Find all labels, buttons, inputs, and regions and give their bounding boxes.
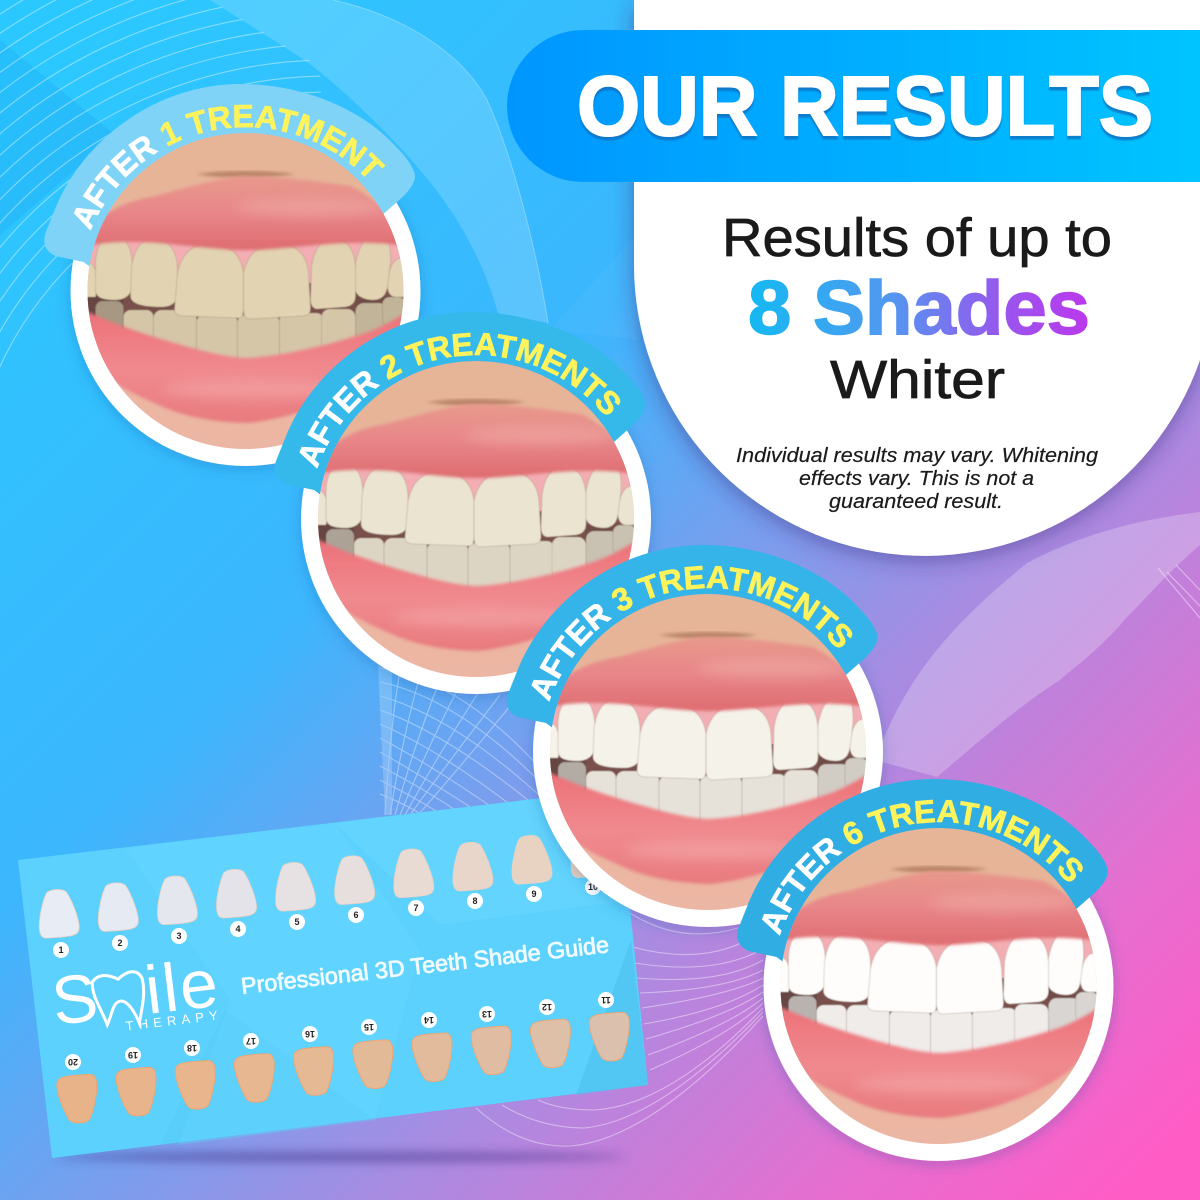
shade numbers: 7 xyxy=(413,903,419,913)
headline: results of up to 8 shades whiter: Whiter xyxy=(830,350,1005,410)
panel: white results panel xyxy=(634,0,1200,556)
banner xyxy=(275,312,645,499)
disclaimer text: effects vary. This is not a xyxy=(799,467,1034,490)
banner xyxy=(507,545,877,732)
result card: after 1 treatment xyxy=(44,84,425,473)
shade numbers: 19 xyxy=(128,1050,138,1060)
shade numbers: 18 xyxy=(187,1043,197,1053)
shade numbers: 6 xyxy=(353,910,359,920)
photo ring xyxy=(301,344,651,694)
photo ring xyxy=(70,116,420,466)
photo ring xyxy=(533,577,883,927)
shade card shadow xyxy=(55,1152,625,1162)
shade numbers: 16 xyxy=(305,1029,315,1039)
shade numbers: 4 xyxy=(235,924,241,934)
smile therapy logo: THERAPY xyxy=(125,1007,224,1034)
title: OUR RESULTS xyxy=(577,59,1153,153)
wave mesh: centre xyxy=(378,665,540,820)
wave ribbon: top centre xyxy=(210,0,548,323)
shade numbers: 11 xyxy=(601,995,611,1005)
banner label: AFTER 2 TREATMENTS xyxy=(300,332,620,469)
shade numbers: 20 xyxy=(68,1057,78,1067)
shade numbers: 13 xyxy=(482,1009,492,1019)
shade number badges xyxy=(53,879,614,1070)
banner label: AFTER 1 TREATMENT xyxy=(74,104,386,231)
smile therapy logo: ile xyxy=(141,945,224,1029)
shade numbers: 17 xyxy=(246,1036,256,1046)
wave ribbon: right swoosh xyxy=(875,512,1200,777)
smile therapy logo: S xyxy=(48,959,102,1040)
shade numbers: 10 xyxy=(588,882,598,892)
header pill xyxy=(507,30,1200,182)
smile photo xyxy=(306,359,646,679)
disclaimer text xyxy=(736,444,1099,513)
shade numbers xyxy=(58,882,611,1067)
banner xyxy=(44,84,415,271)
banner xyxy=(737,779,1108,966)
background facets xyxy=(0,40,640,340)
shade numbers: 1 xyxy=(58,945,64,955)
smile photo xyxy=(538,592,878,912)
shade numbers: 2 xyxy=(117,938,123,948)
teeth: top row xyxy=(37,828,612,939)
smile therapy logo xyxy=(48,945,224,1042)
disclaimer text: Individual results may vary. Whitening xyxy=(736,444,1099,467)
smile photo xyxy=(768,826,1108,1146)
headline: results of up to 8 shades whiter: 8 Shades xyxy=(748,266,1090,351)
shade numbers: 15 xyxy=(364,1022,374,1032)
result card: after 2 treatments xyxy=(275,312,654,703)
shade numbers: 5 xyxy=(294,917,300,927)
headline: results of up to 8 shades whiter: Results of up to xyxy=(722,208,1112,268)
shade numbers: 14 xyxy=(424,1015,434,1025)
shade numbers: 8 xyxy=(472,896,478,906)
photo ring xyxy=(764,811,1114,1161)
wave lines: top left arcs xyxy=(0,0,321,368)
banner label: AFTER 6 TREATMENTS xyxy=(762,800,1083,936)
result card: after 3 treatments xyxy=(506,545,890,936)
banner label: AFTER 3 TREATMENTS xyxy=(532,566,852,702)
teeth: bottom row xyxy=(56,1012,631,1124)
smile photo xyxy=(76,131,416,451)
shade guide heading: Professional 3D Teeth Shade Guide xyxy=(240,931,610,999)
result card: after 6 treatments xyxy=(737,779,1121,1172)
shade numbers: 3 xyxy=(176,931,182,941)
shade guide card xyxy=(18,789,648,1158)
wave arcs: bottom centre xyxy=(476,913,763,1146)
shade numbers: 12 xyxy=(542,1002,552,1012)
headline: results of up to 8 shades whiter xyxy=(722,208,1112,410)
shade numbers: 9 xyxy=(531,889,537,899)
disclaimer text: guaranteed result. xyxy=(829,490,1003,513)
